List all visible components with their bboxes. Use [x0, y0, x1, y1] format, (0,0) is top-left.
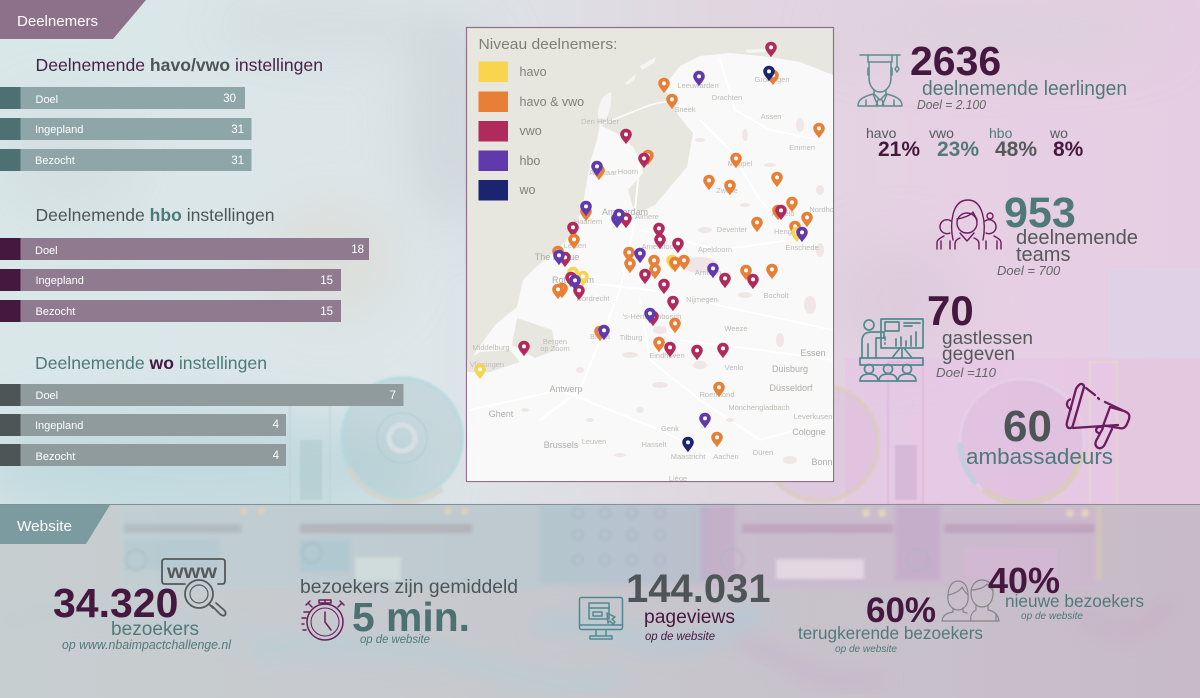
bar: Ingepland 4: Ingepland: [35, 420, 83, 432]
bar: Bezocht 31: [0, 149, 252, 171]
city labels: Leiden: [564, 241, 586, 250]
stats: level percentages: havo: [866, 125, 897, 141]
city labels: Cologne: [792, 427, 826, 437]
city labels: Antwerp: [549, 384, 583, 394]
city labels: Amsterdam: [602, 207, 648, 217]
bars: wo: [0, 384, 404, 466]
stat: 953 teams: 953: [1004, 189, 1076, 237]
city labels: Hengelo: [774, 227, 802, 236]
divider line: [0, 504, 1200, 505]
stat: 60% terugkerende bezoekers: 60%: [866, 591, 936, 630]
bar: Ingepland 4: 4: [273, 419, 280, 431]
city labels: Den Helder: [581, 117, 619, 126]
bar: Doel 7: Doel: [36, 390, 58, 402]
city labels: Apeldoorn: [698, 245, 732, 254]
city labels: Sneek: [674, 105, 696, 114]
icon: stopwatch: [302, 600, 344, 640]
bar: Ingepland 31: [0, 118, 252, 140]
bar: Ingepland 15: [0, 269, 341, 291]
stat: 2636 leerlingen: deelnemende leerlingen: [922, 78, 1127, 100]
stat: 60 ambassadeurs: 60: [1003, 402, 1052, 451]
city labels: Roermond: [699, 390, 735, 399]
heading: wo: Deelnemende wo instellingen: [35, 353, 267, 373]
city labels: Bergen: [543, 337, 567, 346]
city labels: 's-Hertogenbosch: [623, 312, 681, 321]
stat: 144.031 pageviews: 144.031: [626, 567, 771, 611]
city labels: Bonn: [811, 457, 833, 467]
stats: level percentages: hbo: [989, 125, 1013, 141]
bar: Doel 18: Doel: [35, 245, 58, 257]
city labels: Leeuwarden: [677, 81, 719, 90]
stat: 34.320 bezoekers: op www.nbaimpactchallenge.nl: [62, 638, 232, 652]
bar: Doel 7: 7: [390, 390, 396, 402]
stat: 60% terugkerende bezoekers: terugkerende bezoekers: [798, 623, 983, 643]
map pins: [474, 42, 825, 452]
city labels: Nordhorn: [809, 205, 841, 214]
icon: classroom presentation: [860, 319, 923, 381]
icon: www search: [162, 559, 226, 616]
heading: hbo: Deelnemende hbo instellingen: [36, 205, 274, 225]
city labels: Emmen: [789, 143, 815, 152]
bar: Bezocht 4: Bezocht: [36, 451, 75, 463]
bar: Doel 30: [0, 87, 245, 109]
city labels: Breda: [590, 332, 611, 341]
stats: level percentages: 48%: [995, 138, 1037, 161]
bar: Ingepland 31: 31: [231, 124, 244, 136]
city labels: Drachten: [712, 93, 742, 102]
stat: 2636 leerlingen: Doel = 2.100: [917, 97, 987, 112]
stat: 60% terugkerende bezoekers: [798, 591, 983, 655]
stat: 40% nieuwe bezoekers: [988, 560, 1144, 622]
city labels: Almelo: [772, 209, 794, 218]
city labels: Vlissingen: [470, 360, 504, 369]
city labels: Almere: [635, 212, 659, 221]
bar: Ingepland 31: Ingepland: [35, 124, 83, 136]
heading: bezoekers zijn gemiddeld: bezoekers zijn gemiddeld: [300, 577, 518, 598]
city labels: Hasselt: [641, 440, 667, 449]
city labels: Essen: [800, 348, 826, 358]
stat: 70 gastlessen: Doel =110: [936, 365, 997, 380]
stat: 5 min.: 5 min.: [352, 594, 470, 640]
stat: 60% terugkerende bezoekers: op de website: [835, 643, 897, 655]
bar: Doel 30: 30: [223, 93, 236, 105]
stat: 34.320 bezoekers: 34.320: [53, 580, 178, 626]
stat: 60 ambassadeurs: [966, 402, 1113, 469]
city labels: Leverkusen: [794, 412, 832, 421]
stat: 953 teams: teams: [1016, 244, 1070, 266]
heading: havo/vwo: Deelnemende havo/vwo instellingen: [36, 55, 323, 75]
bar: Doel 7: [0, 384, 404, 406]
city labels: Dordrecht: [577, 294, 610, 303]
bar: Bezocht 31: 31: [231, 155, 244, 167]
city labels: Leuven: [582, 437, 606, 446]
city labels: Duisburg: [772, 364, 808, 374]
city labels: Düren: [753, 448, 773, 457]
city labels: Zwolle: [716, 186, 738, 195]
map legend: Niveau deelnemers:: [478, 37, 618, 53]
stat: 953 teams: [997, 189, 1138, 278]
city labels: Deventer: [717, 225, 748, 234]
stats: level percentages: 8%: [1053, 138, 1084, 161]
cloth folds: [0, 600, 1170, 686]
icon: megaphone: [1067, 384, 1129, 448]
stats: level percentages: vwo: [929, 125, 954, 141]
city labels: Amersfoort: [642, 242, 679, 251]
icon: team of three people: [937, 200, 1001, 249]
icon: two people: [942, 580, 999, 621]
city labels: Weeze: [724, 324, 748, 333]
map legend: wo: [518, 183, 536, 197]
city labels: Venlo: [725, 363, 743, 372]
city labels: Haarlem: [574, 217, 602, 226]
stat: 34.320 bezoekers: bezoekers: [111, 619, 199, 640]
bar: Doel 18: 18: [351, 244, 364, 256]
map land: [467, 53, 833, 481]
stat: 40% nieuwe bezoekers: nieuwe bezoekers: [1005, 591, 1144, 611]
city labels: Düsseldorf: [769, 383, 813, 393]
deck body, lower third: [1108, 268, 1200, 358]
icon: graduate student: [858, 55, 902, 106]
bar: Doel 30: Doel: [36, 94, 58, 106]
bar: Ingepland 4: [0, 414, 286, 436]
map legend: havo & vwo: [520, 95, 584, 109]
stat: 953 teams: Doel = 700: [997, 263, 1061, 278]
city labels: Bocholt: [763, 291, 789, 300]
stats: level percentages: wo: [1049, 125, 1068, 141]
stat: 34.320 bezoekers: [53, 580, 232, 652]
stats: level percentages: 23%: [937, 138, 979, 161]
bar: Bezocht 4: 4: [273, 450, 280, 462]
stat: 144.031 pageviews: op de website: [645, 631, 715, 643]
city labels: Maastricht: [671, 452, 706, 461]
bar: Ingepland 15: Ingepland: [36, 275, 84, 287]
map legend: [478, 37, 618, 200]
city labels: op Zoom: [540, 344, 570, 353]
stat: 144.031 pageviews: [626, 567, 771, 643]
stats: level percentages: 21%: [878, 138, 920, 161]
section tag: Deelnemers: Deelnemers: [17, 13, 98, 30]
city labels: Tilburg: [620, 333, 642, 342]
city labels: The Hague: [535, 252, 579, 262]
section tag: Website: Website: [17, 518, 72, 535]
bar: Bezocht 15: Bezocht: [36, 306, 75, 318]
bars: hbo: [0, 238, 369, 322]
stat: 70 gastlessen: 70: [927, 287, 974, 334]
city labels: Groningen: [754, 75, 790, 84]
nature patches: [521, 118, 824, 464]
city labels: Assen: [761, 112, 781, 121]
icon: www search: www: [166, 562, 217, 583]
stat: 40% nieuwe bezoekers: 40%: [988, 560, 1060, 601]
city labels: Arnhem: [695, 268, 721, 277]
map legend: vwo: [520, 124, 542, 138]
stat: 2636 leerlingen: 2636: [910, 38, 1001, 84]
city labels: Ghent: [489, 409, 514, 419]
stat: 60 ambassadeurs: ambassadeurs: [966, 444, 1113, 469]
bar: Bezocht 15: [0, 300, 341, 322]
stat: 40% nieuwe bezoekers: op de website: [1021, 610, 1083, 622]
city labels: Nijmegen: [686, 295, 718, 304]
city labels: Middelburg: [472, 343, 510, 352]
stat: 2636 leerlingen: [910, 38, 1127, 112]
city labels: Enschede: [785, 243, 819, 252]
section tag: Deelnemers: [0, 0, 146, 39]
city labels: Aachen: [713, 452, 739, 461]
icon: computer monitor: [580, 598, 622, 639]
bar: Doel 18: [0, 238, 369, 260]
city labels: Liège: [669, 474, 687, 483]
stat: 5 min.: op de website: [360, 632, 430, 646]
city labels: Mönchengladbach: [728, 403, 790, 412]
bars: havo/vwo: [0, 87, 252, 171]
stat: 144.031 pageviews: pageviews: [644, 607, 735, 628]
lower band: [0, 505, 1200, 698]
city labels: Hoorn: [618, 167, 638, 176]
city labels: Brussels: [544, 440, 579, 450]
panel: map of participants: [466, 28, 841, 483]
map legend: havo: [520, 65, 547, 79]
map legend: hbo: [520, 154, 540, 168]
section tag: Website: [0, 505, 110, 544]
city labels: Rotterdam: [552, 275, 594, 285]
city labels: Eindhoven: [649, 351, 685, 360]
stat: 953 teams: deelnemende: [1016, 227, 1138, 249]
bar: Ingepland 15: 15: [320, 275, 333, 287]
stat: 70 gastlessen: gastlessen: [942, 327, 1033, 348]
stats: level percentages: [866, 125, 1084, 161]
city labels: Meppel: [728, 159, 753, 168]
city labels: Alkmaar: [589, 168, 617, 177]
bar: Bezocht 31: Bezocht: [35, 155, 75, 167]
bar: Bezocht 4: [0, 444, 286, 466]
city labels: [470, 75, 841, 483]
bar: Bezocht 15: 15: [320, 306, 333, 318]
stat: 70 gastlessen: [927, 287, 1033, 380]
city labels: Genk: [661, 424, 679, 433]
stat: 70 gastlessen: gegeven: [942, 344, 1015, 365]
